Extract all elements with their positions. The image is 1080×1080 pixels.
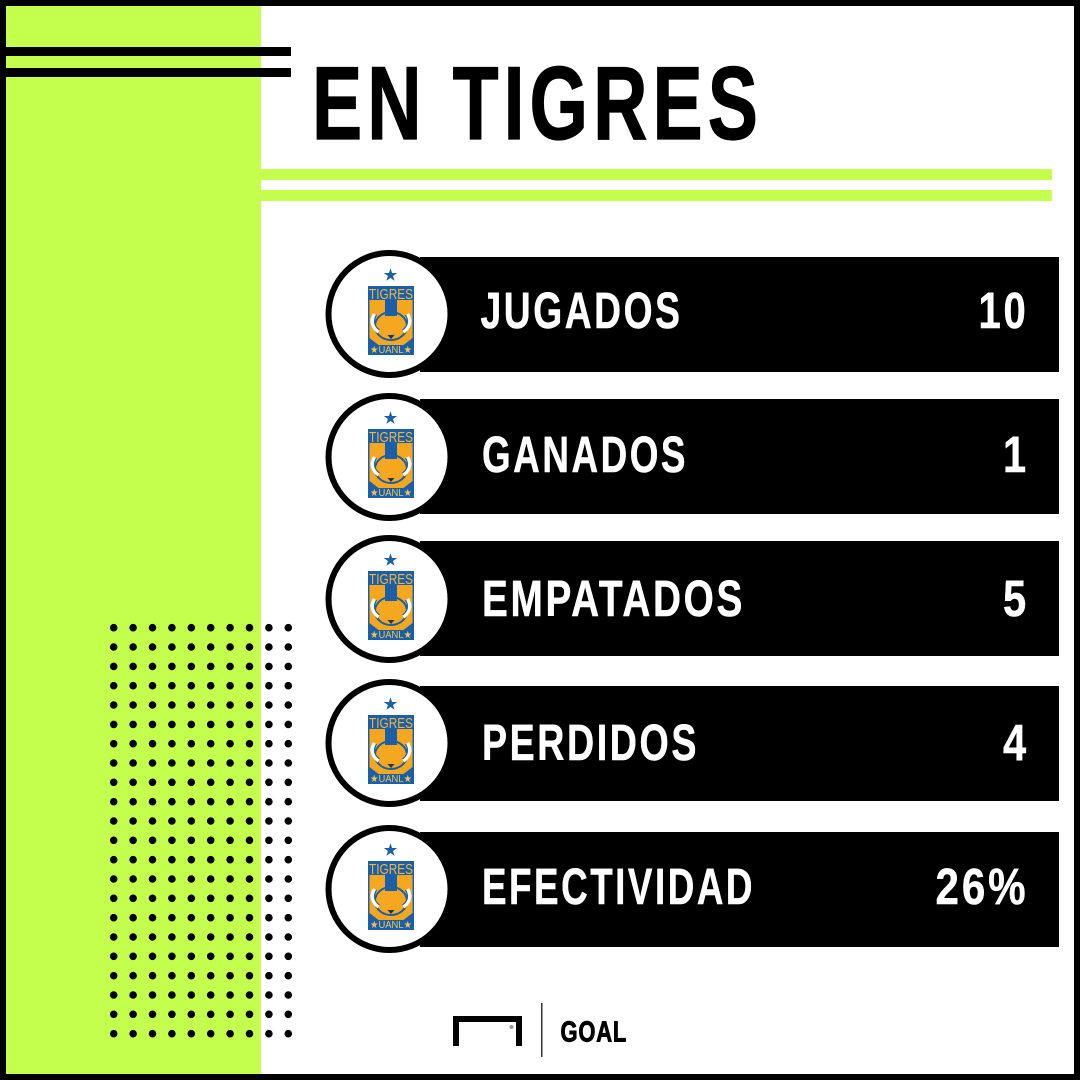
row: efectividad <box>328 828 1059 950</box>
icon: tigres crest: TIGRES <box>369 571 413 588</box>
row: ganados <box>328 396 1059 518</box>
icon: tigres crest: ★UANL★ <box>370 774 412 785</box>
icon: tigres crest: TIGRES <box>369 861 413 878</box>
icon: tigres crest <box>368 696 414 785</box>
label: PERDIDOS <box>482 714 699 771</box>
label: GANADOS <box>482 426 688 483</box>
label: JUGADOS <box>480 282 682 339</box>
black double stripes <box>6 47 291 77</box>
label: EMPATADOS <box>482 570 745 627</box>
icon: tigres crest: ★ <box>384 267 398 284</box>
title: EN TIGRES <box>312 46 763 162</box>
label: EFECTIVIDAD <box>482 858 755 915</box>
icon: tigres crest <box>368 842 414 931</box>
green double stripes <box>261 169 1052 201</box>
icon: tigres crest <box>368 410 414 499</box>
icon: tigres crest <box>368 552 414 641</box>
row: empatados <box>328 538 1059 660</box>
icon: tigres crest: ★ <box>384 410 398 427</box>
icon: tigres crest: ★ <box>384 696 398 713</box>
icon: tigres crest: ★UANL★ <box>370 920 412 931</box>
value: 26% <box>936 858 1028 915</box>
icon: tigres crest: ★UANL★ <box>370 345 412 356</box>
green side panel <box>6 6 261 1074</box>
icon: tigres crest: ★UANL★ <box>370 630 412 641</box>
icon: tigres crest: TIGRES <box>369 429 413 446</box>
row: perdidos <box>328 682 1059 804</box>
goal logo <box>453 1003 627 1057</box>
value: 5 <box>1003 570 1029 627</box>
icon: tigres crest: ★ <box>384 552 398 569</box>
row: jugados <box>328 253 1059 375</box>
dot grid <box>114 628 295 1034</box>
icon: tigres crest: ★ <box>384 842 398 859</box>
value: 10 <box>978 282 1028 339</box>
value: 1 <box>1003 426 1029 483</box>
icon: tigres crest <box>368 267 414 356</box>
icon: tigres crest: TIGRES <box>369 286 413 303</box>
value: 4 <box>1003 714 1029 771</box>
icon: tigres crest: TIGRES <box>369 715 413 732</box>
goal logo: GOAL <box>560 1016 627 1048</box>
icon: tigres crest: ★UANL★ <box>370 488 412 499</box>
